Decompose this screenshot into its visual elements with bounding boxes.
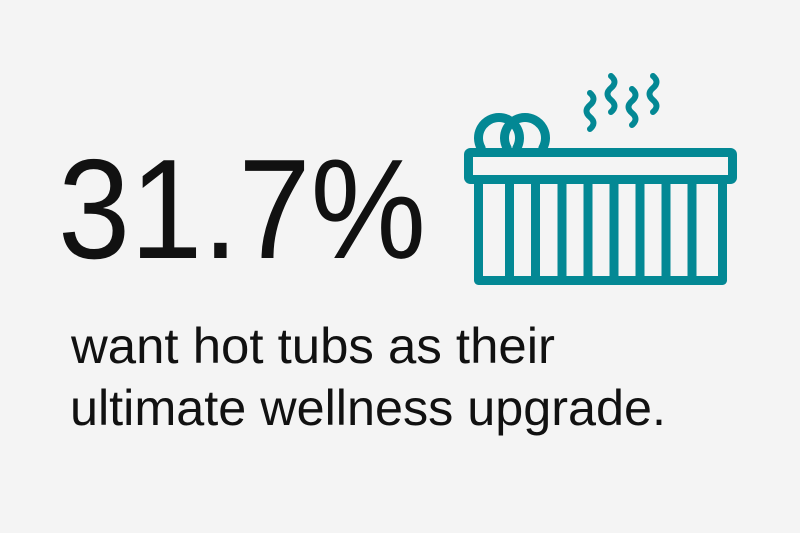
big stat 31.7%: 31.7% [58, 130, 426, 289]
icon: rim [468, 152, 732, 180]
description text [70, 318, 666, 436]
description text: want hot tubs as their [70, 318, 555, 374]
icon: body [478, 180, 722, 280]
description text: ultimate wellness upgrade. [70, 380, 666, 436]
icon: steam [586, 76, 656, 129]
icon: loops [478, 118, 546, 148]
icon: hot tub [468, 76, 732, 280]
